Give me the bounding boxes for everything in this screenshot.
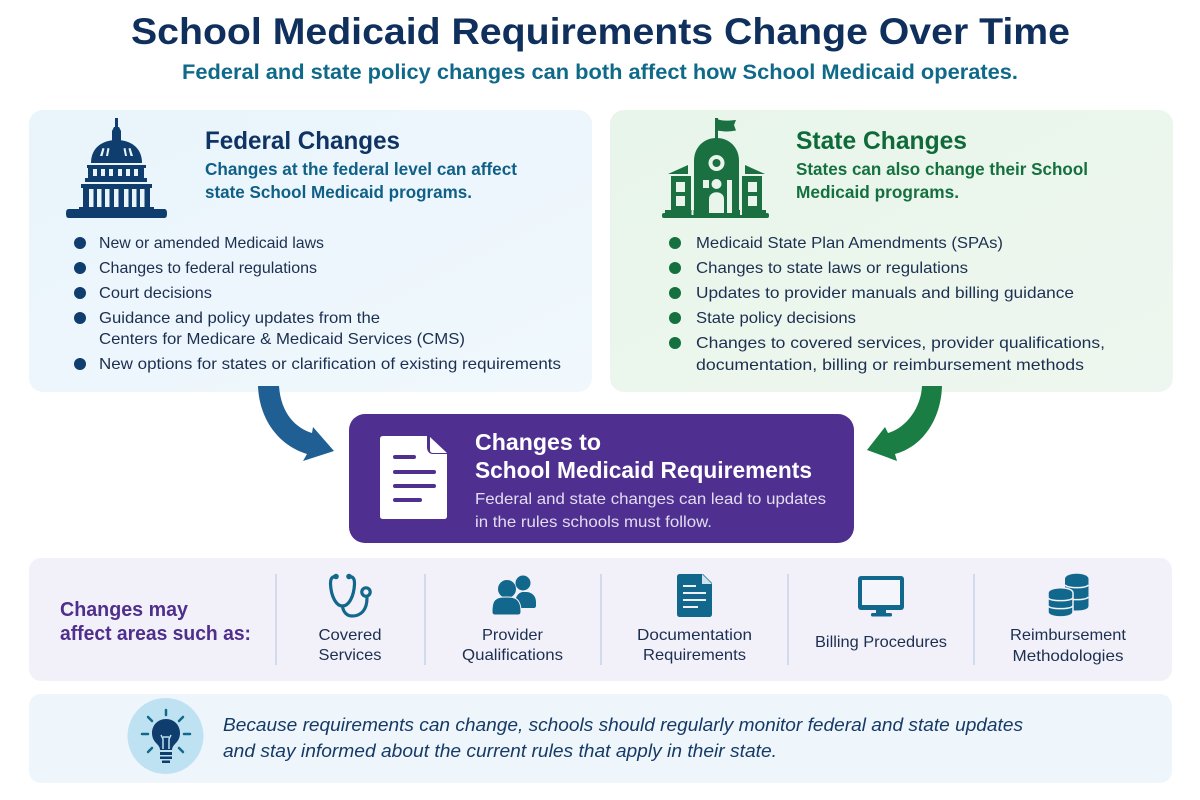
- icon: monitor: [858, 576, 904, 616]
- list: federal changes: Court decisions: [99, 285, 212, 302]
- title: School Medicaid Requirements Change Over Time: [131, 11, 1070, 52]
- list: federal changes: New or amended Medicaid laws: [99, 235, 324, 252]
- icon: stethoscope: [330, 575, 370, 616]
- label: documentation requirements: Documentation: [637, 627, 752, 644]
- panel: changes to requirements: [349, 414, 854, 543]
- text: state intro: Medicaid programs.: [796, 182, 959, 202]
- text: requirements description: [475, 491, 826, 531]
- list: state changes: [669, 235, 1105, 374]
- subtitle: Federal and state policy changes can both affect how School Medicaid operates.: [182, 61, 1018, 84]
- text: federal intro: Changes at the federal level can affect: [205, 159, 517, 179]
- text: requirements description: Federal and state changes can lead to updates: [475, 491, 826, 508]
- label: provider qualifications: Qualifications: [462, 647, 563, 664]
- list: federal changes: New options for states or clarification of existing requirements: [99, 356, 561, 373]
- text: monitoring reminder: Because requirements can change, schools should regularly monitor federal and state updates: [223, 715, 1023, 735]
- label: documentation requirements: [637, 627, 752, 664]
- icon: people: [492, 576, 536, 615]
- text: state intro: States can also change their School: [796, 159, 1088, 179]
- icon: light bulb: [128, 698, 204, 774]
- text: state intro: [796, 159, 1088, 202]
- label: provider qualifications: Provider: [482, 627, 544, 644]
- icon: coin stacks: [1048, 574, 1088, 617]
- label: documentation requirements: Requirements: [643, 647, 746, 664]
- label: covered services: Services: [318, 647, 382, 664]
- text: monitoring reminder: and stay informed about the current rules that apply in their state.: [223, 741, 777, 761]
- icon: document: [380, 436, 447, 519]
- arrow: federal to requirements: [258, 386, 334, 461]
- icon: capitol building: [66, 118, 167, 218]
- panel: affected areas: [29, 558, 1172, 681]
- list: federal changes: Guidance and policy updates from the: [99, 310, 380, 327]
- icon: document: [677, 574, 712, 617]
- text: federal intro: [205, 159, 517, 202]
- text: federal intro: state School Medicaid programs.: [205, 182, 472, 202]
- label: covered services: Covered: [318, 627, 382, 644]
- list: state changes: Changes to state laws or regulations: [696, 260, 968, 277]
- heading: federal changes: Federal Changes: [205, 127, 400, 155]
- heading: affected areas: Changes may: [60, 599, 189, 621]
- list: state changes: Changes to covered services, provider qualifications,: [696, 335, 1105, 352]
- text: requirements description: in the rules schools must follow.: [475, 514, 712, 531]
- panel: federal changes: [29, 110, 592, 392]
- label: provider qualifications: [462, 627, 563, 664]
- heading: affected areas: [60, 599, 251, 645]
- arrow: state to requirements: [867, 386, 942, 461]
- label: covered services: [318, 627, 382, 664]
- list: federal changes: Centers for Medicare & Medicaid Services (CMS): [99, 331, 465, 348]
- label: reimbursement methodologies: Methodologies: [1012, 648, 1124, 665]
- list: federal changes: [74, 235, 561, 373]
- icon: state building: [662, 118, 769, 218]
- list: state changes: State policy decisions: [696, 310, 856, 327]
- list: state changes: documentation, billing or reimbursement methods: [696, 357, 1084, 374]
- list: state changes: Updates to provider manuals and billing guidance: [696, 285, 1074, 302]
- heading: affected areas: affect areas such as:: [60, 623, 251, 645]
- label: billing procedures: Billing Procedures: [815, 634, 947, 651]
- label: reimbursement methodologies: [1010, 627, 1127, 665]
- panel: monitoring reminder: [29, 694, 1172, 783]
- text: monitoring reminder: [223, 715, 1023, 761]
- heading: changes to requirements: Changes to: [475, 429, 601, 455]
- label: reimbursement methodologies: Reimbursement: [1010, 627, 1127, 644]
- heading: changes to requirements: School Medicaid Requirements: [475, 457, 812, 483]
- heading: state changes: State Changes: [796, 127, 967, 155]
- list: state changes: Medicaid State Plan Amendments (SPAs): [696, 235, 1003, 252]
- heading: changes to requirements: [475, 429, 812, 483]
- list: federal changes: Changes to federal regulations: [99, 260, 317, 277]
- panel: state changes: [610, 110, 1173, 392]
